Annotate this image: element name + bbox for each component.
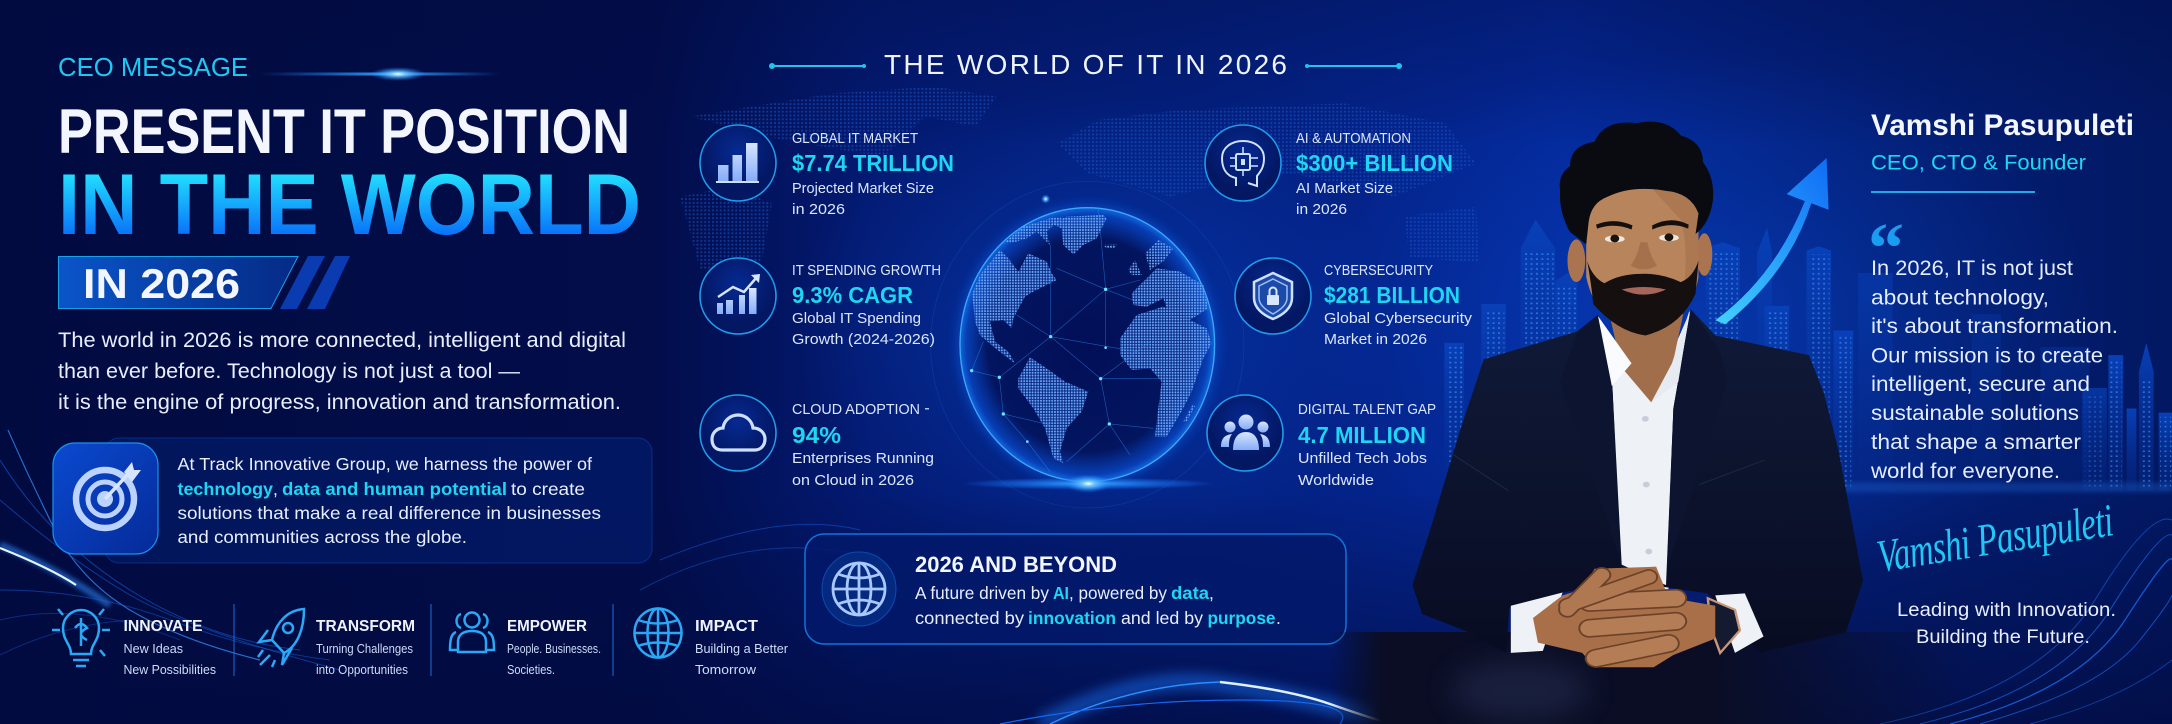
value: transform: Turning Challenges bbox=[316, 642, 413, 656]
city skyline bbox=[1444, 220, 2172, 492]
ears bbox=[1567, 239, 1585, 282]
statement text: technology bbox=[178, 479, 273, 499]
statement text: and communities across the globe. bbox=[178, 527, 467, 547]
value: transform bbox=[258, 609, 415, 677]
table bbox=[1330, 632, 1970, 724]
eyes and brows bbox=[1596, 221, 1633, 229]
signature: Vamshi Pasupuleti bbox=[1874, 494, 2117, 582]
stat: digital talent gap: 4.7 MILLION bbox=[1298, 422, 1426, 448]
globe bbox=[931, 181, 1244, 508]
panel: company statement bbox=[53, 438, 652, 563]
watch bbox=[1708, 598, 1740, 653]
stat: AI and automation bbox=[1205, 125, 1453, 218]
hands bbox=[1533, 567, 1715, 667]
stat: global IT market: in 2026 bbox=[792, 201, 845, 218]
CEO quote: that shape a smarter bbox=[1871, 431, 2081, 454]
hair bbox=[1560, 122, 1713, 244]
icon: quote mark: “ bbox=[1868, 208, 1904, 288]
beard bbox=[1587, 261, 1699, 335]
wave lines left bbox=[0, 430, 340, 670]
callout text: . bbox=[1276, 608, 1281, 628]
year tag: IN 2026 bbox=[83, 260, 240, 307]
icon: target bbox=[53, 443, 158, 554]
CEO quote: Our mission is to create bbox=[1871, 344, 2103, 368]
background dotted world map bbox=[680, 87, 1480, 270]
callout text: AI bbox=[1053, 583, 1069, 603]
callout text bbox=[915, 583, 1281, 628]
icon: shield bbox=[1235, 258, 1311, 334]
icon: growth chart bbox=[700, 258, 776, 334]
value: impact: Tomorrow bbox=[695, 663, 757, 677]
stat: cloud adoption: CLOUD ADOPTION bbox=[792, 402, 920, 418]
CEO quote: intelligent, secure and bbox=[1871, 373, 2090, 396]
stat: IT spending growth: Growth (2024-2026) bbox=[792, 331, 935, 348]
stat: IT spending growth: Global IT Spending bbox=[792, 310, 921, 327]
intro paragraph: The world in 2026 is more connected, intelligent and digital bbox=[58, 328, 626, 352]
eyebrow: CEO message bbox=[58, 52, 500, 82]
tagline: Building the Future. bbox=[1916, 626, 2090, 648]
statement text: data and human potential bbox=[282, 479, 507, 499]
icon: bar chart bbox=[700, 125, 776, 201]
value: impact bbox=[634, 608, 788, 677]
neck skin bbox=[1609, 314, 1683, 402]
value: innovate: INNOVATE bbox=[124, 618, 203, 635]
callout text: purpose bbox=[1208, 608, 1276, 628]
CEO quote: it's about transformation. bbox=[1871, 315, 2118, 338]
panel: 2026 and beyond: 2026 AND BEYOND bbox=[915, 552, 1117, 577]
stat: global IT market: $7.74 TRILLION bbox=[792, 150, 954, 176]
stat: digital talent gap: Unfilled Tech Jobs bbox=[1298, 450, 1427, 467]
icon: rocket bbox=[258, 609, 304, 667]
value: innovate bbox=[52, 609, 216, 677]
stat: cloud adoption: on Cloud in 2026 bbox=[792, 472, 914, 489]
CEO name and title: Vamshi Pasupuleti bbox=[1871, 109, 2134, 142]
stat: AI and automation: AI & AUTOMATION bbox=[1296, 131, 1411, 147]
stat: digital talent gap bbox=[1207, 395, 1436, 489]
CEO name and title bbox=[1871, 109, 2134, 193]
section heading: THE WORLD OF IT IN 2026 bbox=[884, 49, 1287, 80]
shirt bbox=[1598, 310, 1691, 589]
value: impact: Building a Better bbox=[695, 642, 788, 656]
stat: IT spending growth: IT SPENDING GROWTH bbox=[792, 263, 941, 279]
value: transform: TRANSFORM bbox=[316, 618, 415, 635]
network lines bbox=[972, 208, 1160, 472]
value: impact: IMPACT bbox=[695, 618, 758, 635]
stat: AI and automation: in 2026 bbox=[1296, 201, 1347, 218]
stat: IT spending growth bbox=[700, 258, 941, 348]
eyebrow: CEO message: CEO MESSAGE bbox=[58, 52, 248, 82]
CEO quote: world for everyone. bbox=[1870, 460, 2060, 483]
callout text: connected by bbox=[915, 608, 1024, 628]
main title: PRESENT IT POSITION bbox=[58, 97, 630, 167]
callout text: and led by bbox=[1121, 608, 1203, 628]
icon: people group bbox=[1207, 395, 1283, 471]
stat: cloud adoption bbox=[700, 395, 934, 489]
statement text: , bbox=[273, 479, 278, 499]
statement text: solutions that make a real difference in businesses bbox=[178, 503, 601, 523]
stat: cloud adoption: Enterprises Running bbox=[792, 450, 934, 467]
stat: cybersecurity: Market in 2026 bbox=[1324, 331, 1427, 348]
stat: global IT market bbox=[700, 125, 954, 218]
shirt buttons bbox=[1642, 416, 1652, 554]
stat: cybersecurity: $281 BILLION bbox=[1324, 282, 1460, 308]
cuffs bbox=[1511, 593, 1563, 653]
value: innovate: New Ideas bbox=[124, 642, 183, 656]
statement text: to create bbox=[511, 479, 585, 499]
icon: light bulb bbox=[52, 609, 110, 666]
main title: IN THE WORLD bbox=[58, 157, 641, 253]
intro paragraph bbox=[58, 328, 626, 414]
intro paragraph: it is the engine of progress, innovation and transformation. bbox=[58, 390, 621, 414]
value: empower: Societies. bbox=[507, 663, 555, 677]
jacket bbox=[1412, 309, 1863, 653]
section heading bbox=[769, 49, 1402, 80]
statement text bbox=[178, 454, 601, 547]
tagline bbox=[1897, 599, 2116, 648]
stat: global IT market: Projected Market Size bbox=[792, 180, 934, 197]
icon: cloud bbox=[700, 395, 776, 471]
stat: cybersecurity: Global Cybersecurity bbox=[1324, 310, 1473, 327]
callout text: , powered by bbox=[1069, 583, 1167, 603]
icon: AI head bbox=[1205, 125, 1281, 201]
tagline: Leading with Innovation. bbox=[1897, 599, 2116, 621]
stat: AI and automation: AI Market Size bbox=[1296, 180, 1393, 197]
CEO quote bbox=[1870, 257, 2118, 483]
stat: IT spending growth: 9.3% CAGR bbox=[792, 282, 913, 308]
wave lines center bottom bbox=[640, 524, 1400, 724]
stat: global IT market: GLOBAL IT MARKET bbox=[792, 131, 918, 147]
growth arrow bbox=[1715, 158, 1829, 324]
statement text: At Track Innovative Group, we harness the power of bbox=[178, 454, 592, 474]
stat: AI and automation: $300+ BILLION bbox=[1296, 150, 1453, 176]
CEO name and title: CEO, CTO & Founder bbox=[1871, 150, 2086, 174]
callout text: innovation bbox=[1028, 608, 1116, 628]
wave lines bottom right bbox=[1880, 519, 2172, 724]
intro paragraph: than ever before. Technology is not just a tool — bbox=[58, 359, 520, 383]
icon: globe bbox=[822, 552, 896, 626]
stat: digital talent gap: Worldwide bbox=[1298, 472, 1374, 489]
value: empower: EMPOWER bbox=[507, 618, 587, 635]
panel: 2026 and beyond bbox=[805, 534, 1346, 644]
main title bbox=[58, 97, 641, 253]
icon: globe bbox=[634, 608, 682, 658]
value: empower bbox=[450, 612, 601, 677]
callout text: , bbox=[1209, 583, 1214, 603]
value: transform: into Opportunities bbox=[316, 663, 408, 677]
collar bbox=[1598, 316, 1632, 386]
stat: cybersecurity: CYBERSECURITY bbox=[1324, 263, 1433, 279]
icon: people bbox=[450, 612, 494, 652]
stat: cloud adoption: 94% bbox=[792, 422, 841, 448]
callout text: data bbox=[1171, 583, 1209, 603]
value: innovate: New Possibilities bbox=[124, 663, 216, 677]
stat: digital talent gap: DIGITAL TALENT GAP bbox=[1298, 402, 1436, 418]
CEO quote: sustainable solutions bbox=[1871, 402, 2079, 425]
face bbox=[1586, 177, 1699, 335]
year tag bbox=[58, 256, 350, 309]
value: empower: People. Businesses. bbox=[507, 642, 601, 656]
callout text: A future driven by bbox=[915, 583, 1049, 603]
CEO quote: about technology, bbox=[1871, 286, 2049, 310]
portrait: CEO bbox=[1412, 122, 1863, 667]
CEO quote: In 2026, IT is not just bbox=[1871, 257, 2073, 280]
stat: cybersecurity bbox=[1235, 258, 1473, 348]
